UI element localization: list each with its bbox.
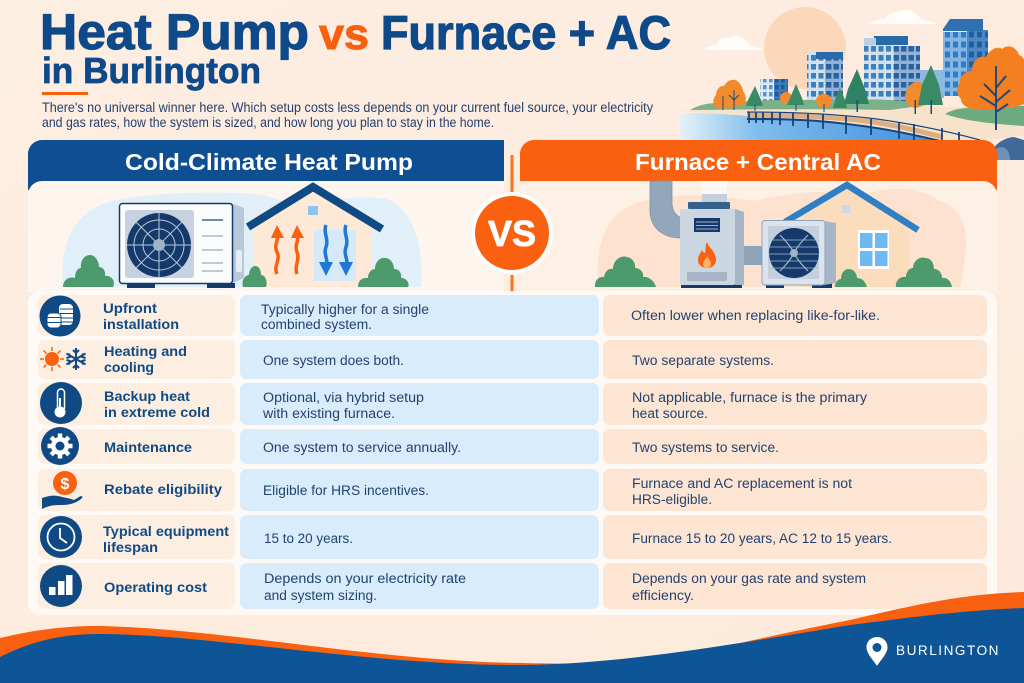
intro text: There's no universal winner here. Which setup costs less depends on your current fuel source, your electricity: [42, 100, 653, 115]
footer location badge: BURLINGTON: [896, 643, 1000, 658]
row: backup heat: in extreme cold: [104, 404, 210, 420]
intro text: [42, 100, 653, 130]
row: backup heat: Backup heat: [104, 388, 190, 404]
panel: heat pump: [28, 140, 504, 292]
row: heating and cooling: Heating and: [104, 343, 187, 359]
VS badge: [471, 192, 553, 274]
row: backup heat: Not applicable, furnace is the primary: [632, 390, 867, 405]
row: operating cost: Depends on your gas rate and system: [632, 571, 866, 586]
row: typical equipment lifespan: Typical equipment: [103, 523, 229, 539]
heat pump header: [28, 140, 504, 190]
furnace illustration: [595, 181, 966, 288]
row: operating cost: [38, 563, 987, 609]
row: heating and cooling: One system does both.: [263, 353, 404, 368]
skyline illustration: [680, 7, 1024, 160]
connector pipe: [744, 246, 762, 265]
row: backup heat: [38, 382, 987, 425]
flame: [698, 242, 716, 268]
row: backup heat: heat source.: [632, 406, 708, 421]
warm air arrows: [271, 225, 304, 274]
duct: [650, 181, 681, 238]
row: typical equipment lifespan: lifespan: [103, 539, 158, 555]
panel: furnace and AC: [520, 140, 997, 292]
row: upfront installation: [38, 295, 987, 336]
title: vs: [319, 10, 369, 59]
heat pump illustration: [62, 187, 422, 288]
cool air arrows: [319, 225, 353, 276]
AC unit: [762, 220, 836, 288]
row: rebate eligibility: Eligible for HRS incentives.: [263, 483, 429, 498]
row: typical equipment lifespan: Furnace 15 to 20 years, AC 12 to 15 years.: [632, 531, 892, 546]
buildings: [760, 19, 988, 102]
row: typical equipment lifespan: [38, 515, 987, 559]
row: operating cost: and system sizing.: [264, 588, 377, 603]
row: heating and cooling: Two separate systems.: [632, 353, 774, 368]
row: maintenance: Two systems to service.: [632, 440, 779, 455]
row: rebate eligibility: Rebate eligibility: [104, 481, 222, 497]
row: rebate eligibility: HRS-eligible.: [632, 492, 712, 507]
trees: [713, 65, 943, 114]
row: typical equipment lifespan: 15 to 20 years.: [264, 531, 353, 546]
furnace unit: [680, 181, 744, 288]
icon: thermometer: [40, 382, 82, 424]
title: Heat Pump: [40, 4, 309, 60]
water: [680, 113, 940, 140]
title: [40, 4, 671, 91]
icon: map pin: [866, 637, 888, 666]
heat pump illustration panel: [28, 181, 504, 292]
VS badge: VS: [488, 213, 536, 254]
bushes: [595, 257, 952, 287]
icon: sun and snowflake: [40, 347, 86, 371]
title underline accent: [42, 92, 88, 95]
icon: clock: [40, 516, 82, 558]
title: in Burlington: [42, 50, 261, 91]
furnace header: [520, 140, 997, 190]
icon: bar chart: [40, 565, 82, 607]
clouds: [704, 10, 938, 50]
intro text: and gas rates, how the system is sized, and how long you plan to stay in the home.: [42, 115, 494, 130]
row: upfront installation: Often lower when replacing like-for-like.: [631, 308, 880, 323]
row: upfront installation: installation: [103, 316, 179, 332]
row: operating cost: Depends on your electricity rate: [264, 571, 466, 586]
row: backup heat: Optional, via hybrid setup: [263, 390, 424, 405]
furnace header: Furnace + Central AC: [635, 149, 881, 175]
boardwalk: [747, 112, 980, 141]
row: upfront installation: combined system.: [261, 317, 372, 332]
icon: hand with coin: $: [61, 476, 70, 493]
outdoor heat pump unit: [120, 203, 244, 288]
house: [248, 187, 382, 287]
row: rebate eligibility: [38, 469, 987, 511]
icon: coins: [40, 296, 80, 336]
row: maintenance: Maintenance: [104, 439, 192, 455]
sand shoreline: [680, 106, 1024, 140]
row: operating cost: efficiency.: [632, 588, 694, 603]
row: upfront installation: Typically higher for a single: [261, 302, 429, 317]
icon: gear: [41, 427, 79, 465]
house: [785, 185, 918, 287]
greenery band: [690, 99, 935, 110]
furnace illustration panel: [520, 181, 997, 292]
footer wave: [0, 592, 1024, 683]
row: maintenance: One system to service annually.: [263, 440, 461, 455]
row: backup heat: with existing furnace.: [262, 406, 395, 421]
row: maintenance: [38, 427, 987, 465]
row: rebate eligibility: Furnace and AC replacement is not: [632, 476, 852, 491]
row: operating cost: Operating cost: [104, 579, 207, 595]
rocks: [990, 137, 1024, 160]
icon: hand with coin: [42, 471, 82, 509]
title: Furnace + AC: [381, 6, 671, 59]
row: heating and cooling: [38, 340, 987, 379]
center divider: [510, 155, 514, 292]
row: upfront installation: Upfront: [103, 300, 157, 316]
large autumn tree: [957, 46, 1024, 130]
sun: [764, 7, 846, 89]
comparison table: [28, 291, 997, 615]
heat pump header: Cold-Climate Heat Pump: [125, 149, 413, 175]
row: heating and cooling: cooling: [104, 359, 154, 375]
footer location badge: [866, 637, 1000, 666]
bushes: [63, 255, 409, 287]
table panel: [28, 291, 997, 615]
